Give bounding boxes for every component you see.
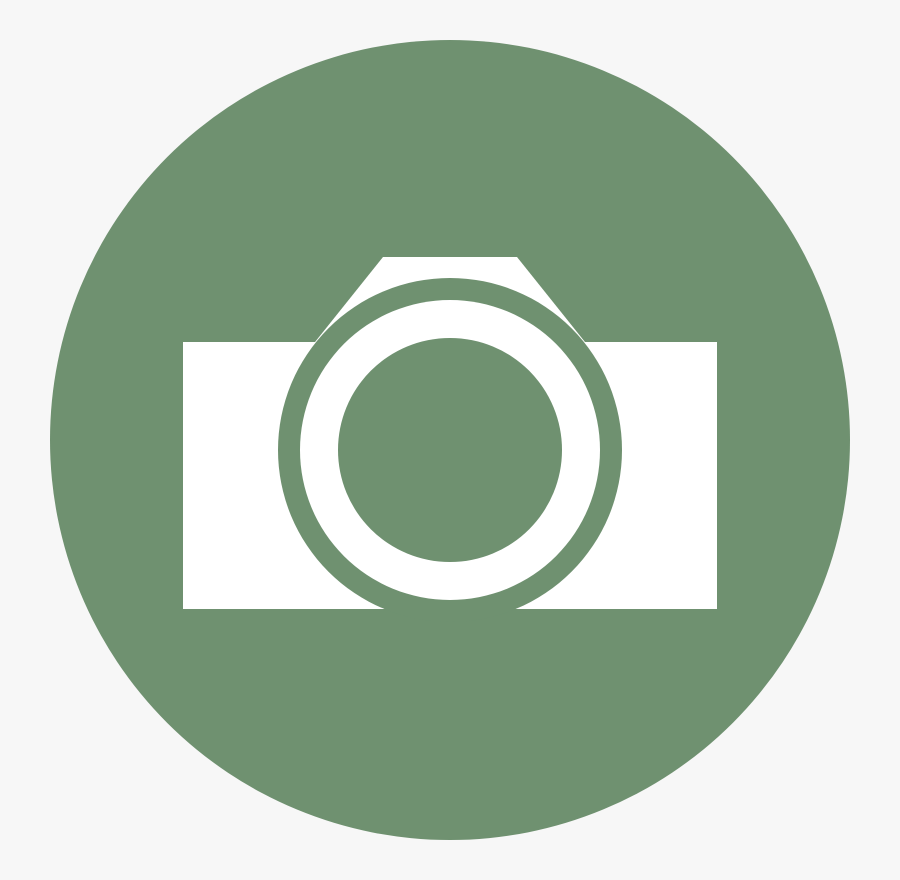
camera body: [183, 342, 717, 609]
lens inner: [338, 338, 562, 562]
lens outer gap ring: [278, 278, 622, 622]
lens white ring: [300, 300, 600, 600]
camera top viewfinder: [315, 257, 585, 342]
icon: camera: [183, 257, 717, 622]
